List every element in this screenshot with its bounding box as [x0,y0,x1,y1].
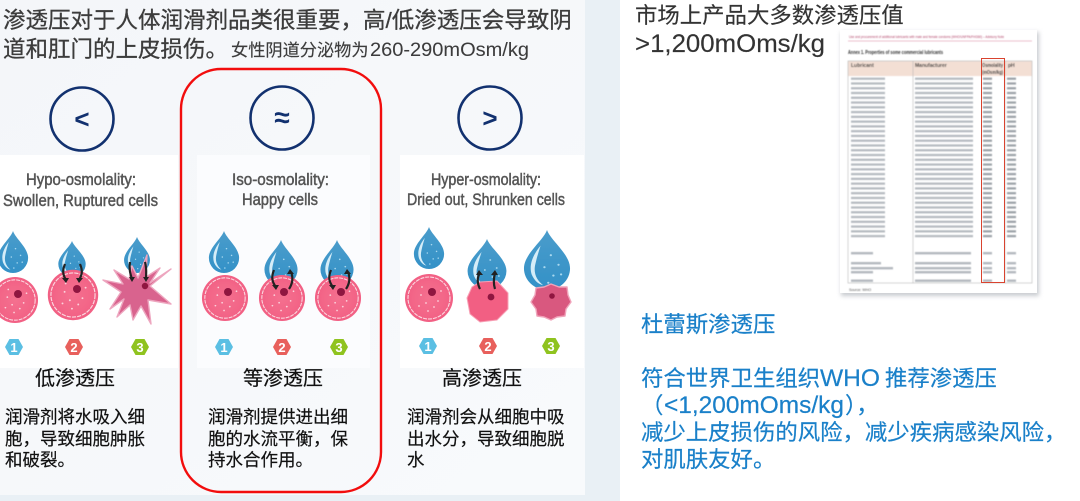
table: commercial lubricants: Source: WHO [849,288,871,292]
Durex callout text: WHO [820,365,880,392]
table: commercial lubricants: (mOsm/kg) [982,70,1003,76]
icon: less than circle [50,88,114,150]
market heading: >1,200mOms/kg [635,30,825,58]
hyper heading [407,170,565,209]
hypo stage 1: drop and cell [0,231,38,323]
hyper heading: Dried out, Shrunken cells [407,190,565,209]
highlight: red rounded frame [181,69,381,492]
iso step badges: 1 [220,340,228,355]
iso stage 1 [202,231,248,321]
Durex callout text: ）， [845,393,879,418]
icon: greater than circle: > [482,103,498,133]
table: commercial lubricants: Use and procurement of additional lubricants with male and female condoms (WHO/UNFPA/FHI360) – Advisory Note [849,35,1004,39]
panel title [3,8,572,62]
hyper step badges: 1 [424,339,432,354]
panel: market products [620,0,1080,501]
hypo description: 和破裂。 [5,450,75,470]
hyper description: 水 [407,450,425,470]
hypo step badges [5,339,149,355]
hyper step badges [419,338,560,354]
hypo step badges: 3 [136,340,144,355]
hyper label: 高渗透压 [442,367,522,390]
hyper step badges: 2 [484,339,492,354]
hypo step badges: 1 [10,340,18,355]
Durex callout text [641,312,1066,472]
iso step badges: 3 [335,340,343,355]
Durex callout text: <1,200mOms/kg [664,392,844,419]
Durex callout text: 对肌肤友好。 [641,447,775,472]
iso description [208,407,348,470]
table: commercial lubricants: Manufacturer [915,63,947,69]
hypo heading: Hypo-osmolality: [26,170,136,189]
iso illustration panel [197,155,370,368]
table: commercial lubricants: Osmolality [982,63,1003,69]
table: commercial lubricants [840,30,1039,296]
Durex callout text: 减少上皮损伤的风险，减少疾病感染风险， [641,420,1066,445]
panel title: 260-290mOsm/kg [370,39,529,61]
icon: less than circle: < [74,104,90,134]
hypo label: 低渗透压 [35,367,115,390]
hypo description [5,407,145,470]
icon: greater than circle [458,86,522,150]
hyper heading: Hyper-osmolality: [431,170,541,189]
Durex callout text: 杜蕾斯渗透压 [641,312,775,337]
icon: approximately equal circle [250,86,314,150]
panel title: 女性阴道分泌物为 [231,40,369,60]
panel title: 渗透压对于人体润滑剂品类很重要，高/低渗透压会导致阴 [3,8,572,33]
hypo description: 胞，导致细胞肿胀 [5,429,145,449]
table: commercial lubricants: Annex 1. Properties of some commercial lubricants [848,50,943,56]
hyper illustration panel [400,155,584,368]
iso description: 持水合作用。 [208,450,313,470]
hypo heading [3,170,158,210]
market heading: 市场上产品大多数渗透压值 [635,3,904,28]
iso heading [232,170,329,209]
hyper stage 2: shrinking cell [467,239,508,322]
hyper description: 润滑剂会从细胞中吸 [407,407,564,427]
iso label: 等渗透压 [243,367,323,390]
iso stage 3 [315,240,361,321]
hyper step badges: 3 [547,339,555,354]
Durex callout text: （ [641,393,663,418]
hypo stage 3: ruptured cell [103,237,171,324]
hyper description: 出水分，导致细胞脱 [407,429,564,449]
iso stage 2 [259,240,305,321]
iso description: 胞的水流平衡，保 [208,429,348,449]
hypo step badges: 2 [70,340,78,355]
hyper stage 3: shrunken cell [524,230,571,320]
hypo stage 2: swelling cell [48,241,98,320]
hypo description: 润滑剂将水吸入细 [5,407,145,427]
iso description: 润滑剂提供进出细 [208,407,348,427]
icon: approximately equal circle: ≈ [274,102,290,133]
hyper stage 1 [405,227,453,322]
hyper description [407,407,564,470]
hypo illustration panel [0,155,178,368]
iso step badges: 2 [278,340,286,355]
market heading [635,3,904,58]
iso heading: Iso-osmolality: [232,170,329,189]
panel title: 道和肛门的上皮损伤。 [3,37,228,62]
table: commercial lubricants: pH [1008,63,1015,69]
iso step badges [215,339,348,355]
Durex callout text: 符合世界卫生组织 [641,366,820,391]
hypo heading: Swollen, Ruptured cells [3,191,158,210]
iso heading: Happy cells [242,190,318,209]
panel: osmolality explanation [0,0,585,495]
Durex callout text: 推荐渗透压 [885,366,997,391]
table: commercial lubricants: Lubricant [851,63,874,69]
